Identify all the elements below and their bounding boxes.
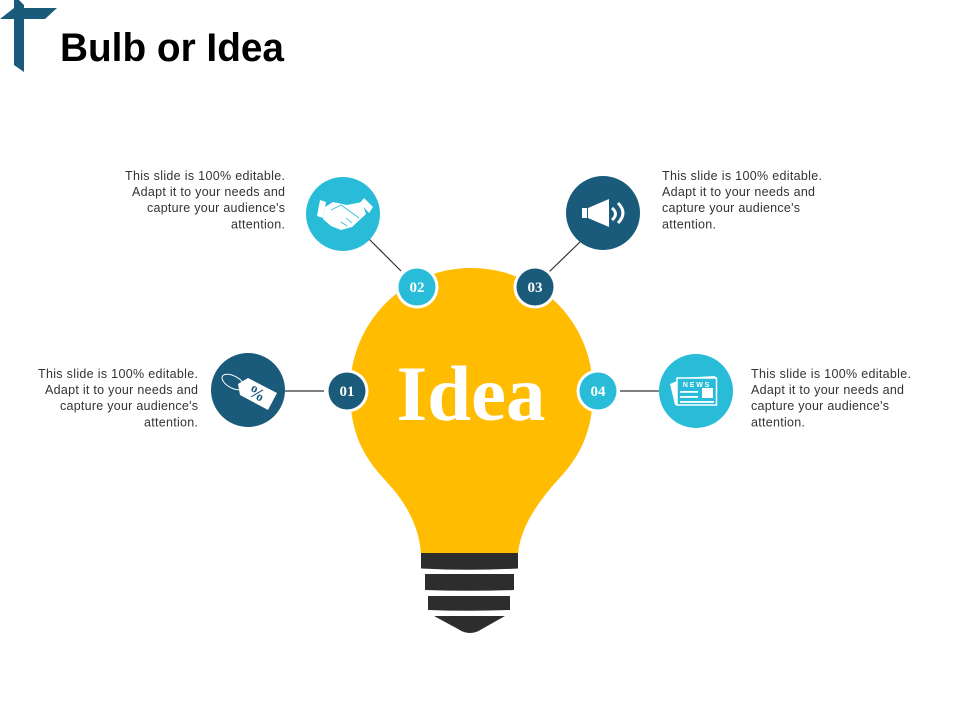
text block: bottom right: This slide is 100% editable. xyxy=(751,367,911,381)
text block: top right: attention. xyxy=(662,218,716,232)
connector: 04 xyxy=(620,390,660,392)
text block: top right: capture your audience's xyxy=(662,201,800,215)
light bulb xyxy=(350,268,593,633)
text block: top left: attention. xyxy=(231,218,285,232)
number badge 04 xyxy=(576,370,620,412)
number badge 02: 02 xyxy=(410,280,424,296)
text block: top right xyxy=(662,169,822,232)
text block: bottom left: attention. xyxy=(144,416,198,430)
icon: megaphone speaker xyxy=(566,176,640,250)
text block: top left: This slide is 100% editable. xyxy=(125,169,285,183)
text block: bottom left xyxy=(38,367,198,430)
icon: newspaper xyxy=(659,354,733,428)
logo corner mark xyxy=(0,0,57,72)
number badge 02 xyxy=(396,266,438,308)
text block: top left: capture your audience's xyxy=(147,201,285,215)
text block: bottom left: This slide is 100% editable. xyxy=(38,367,198,381)
bulb label: Idea: Idea xyxy=(396,350,546,437)
text block: bottom right: capture your audience's xyxy=(751,399,889,413)
bulb base stripes xyxy=(421,553,518,633)
number badge 03: 03 xyxy=(528,280,542,296)
text block: top left: Adapt it to your needs and xyxy=(132,185,285,199)
text block: top right: This slide is 100% editable. xyxy=(662,169,822,183)
connector: 03 xyxy=(549,241,581,272)
icon: price tag xyxy=(211,353,285,427)
number badge 04: 04 xyxy=(590,384,606,400)
text block: top right: Adapt it to your needs and xyxy=(662,185,815,199)
text block: bottom right: Adapt it to your needs and xyxy=(751,383,904,397)
bulb glass xyxy=(350,268,593,553)
title: Bulb or Idea xyxy=(60,26,285,70)
text block: bottom left: Adapt it to your needs and xyxy=(45,383,198,397)
icon: price tag: % xyxy=(245,381,269,406)
text block: top left xyxy=(125,169,285,232)
text block: bottom right xyxy=(751,367,911,430)
number badge 03 xyxy=(514,266,556,308)
number badge 01: 01 xyxy=(340,384,354,400)
connector: 02 xyxy=(369,239,401,271)
text block: bottom left: capture your audience's xyxy=(60,399,198,413)
icon: handshake xyxy=(306,177,380,251)
number badge 01 xyxy=(326,370,368,412)
text block: bottom right: attention. xyxy=(751,416,805,430)
connector: 01 xyxy=(285,390,324,392)
icon: newspaper: NEWS xyxy=(683,382,711,389)
